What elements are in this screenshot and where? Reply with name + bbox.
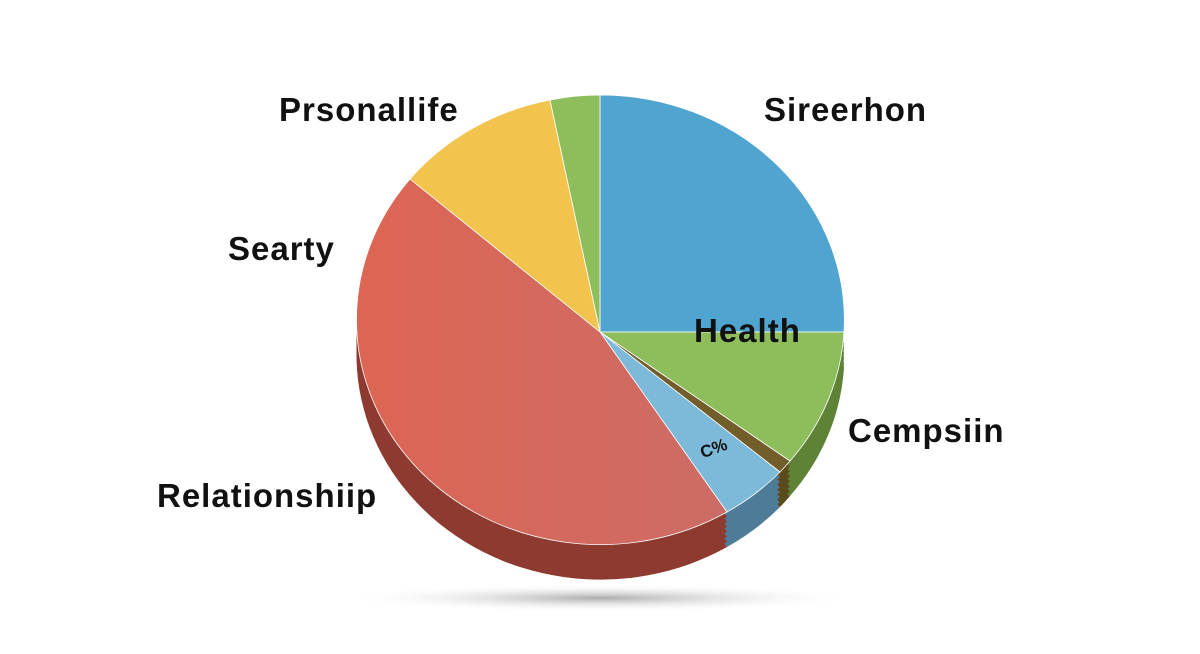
slice: red: [356, 179, 727, 545]
slice: small green: [550, 95, 600, 332]
label: Prsonallife: Prsonallife: [279, 91, 459, 128]
label: Searty: Searty: [228, 230, 335, 267]
slice: yellow: [410, 100, 600, 332]
slice: blue: [600, 95, 844, 332]
label: Relationshiip: Relationshiip: [157, 477, 377, 514]
shadow: [340, 584, 860, 612]
pie side: [356, 184, 844, 580]
label: C%: C%: [698, 435, 730, 462]
pie top: [356, 95, 844, 545]
label: Health: Health: [694, 312, 801, 349]
slice: green: [600, 332, 844, 461]
slice: light blue: [600, 332, 780, 512]
label: Sireerhon: Sireerhon: [764, 91, 927, 128]
slice: brown: [600, 332, 790, 472]
label: Cempsiin: Cempsiin: [848, 412, 1005, 449]
